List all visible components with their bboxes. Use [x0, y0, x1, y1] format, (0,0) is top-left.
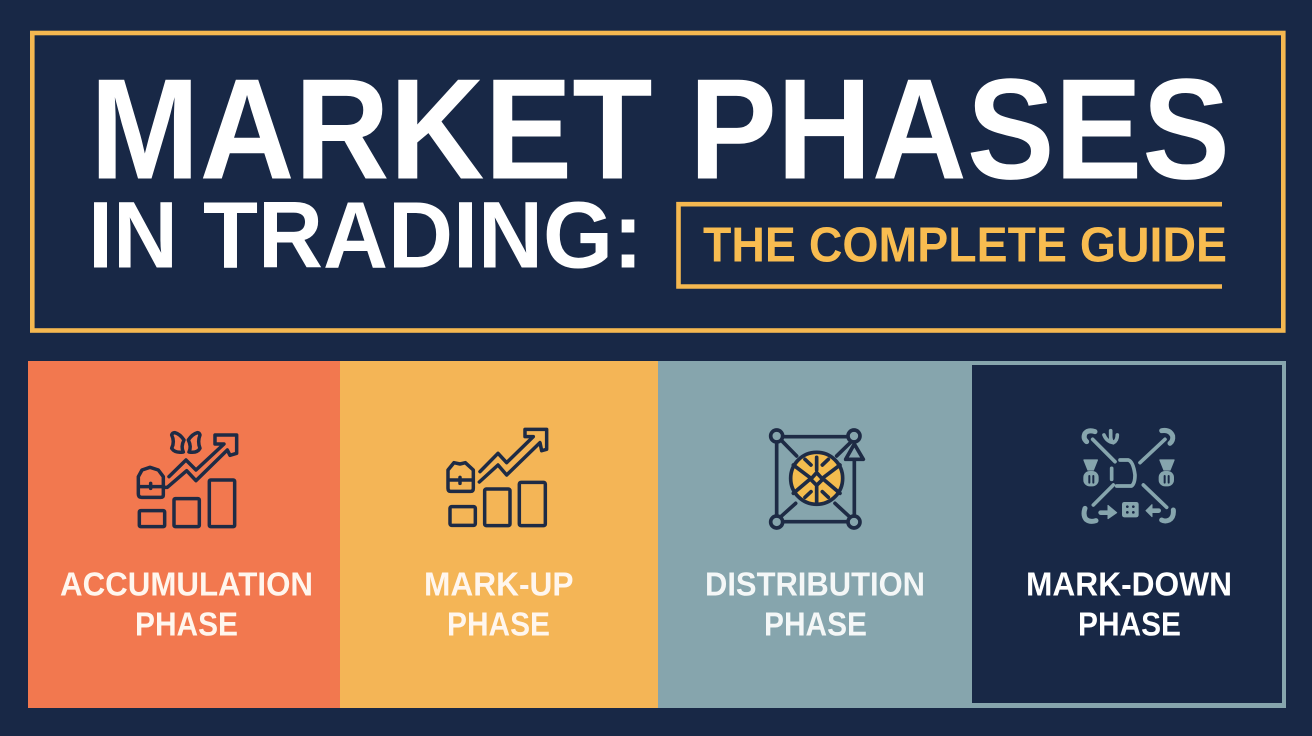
panel: distribution phase [658, 361, 1286, 708]
title block [88, 50, 1230, 288]
icon: mark-down arrows [1084, 430, 1174, 521]
icon: accumulation chart [138, 433, 237, 527]
mark-up label: PHASE [447, 606, 550, 643]
subtitle text: THE COMPLETE GUIDE [703, 218, 1227, 272]
distribution background [658, 361, 1286, 708]
accumulation background [28, 361, 340, 708]
mark-up label: MARK-UP [424, 566, 573, 602]
title panel frame [32, 33, 1283, 330]
icon: distribution network [771, 430, 863, 528]
panel: mark-down phase [972, 365, 1282, 703]
distribution label: DISTRIBUTION [705, 566, 925, 602]
subtitle box [678, 204, 1227, 286]
panel: accumulation phase [28, 361, 340, 708]
mark-down label: PHASE [1078, 606, 1181, 643]
mark-down label: MARK-DOWN [1026, 566, 1232, 602]
accumulation label: PHASE [135, 606, 238, 643]
icon: mark-up chart [448, 429, 547, 526]
distribution label: PHASE [764, 606, 867, 643]
accumulation label: ACCUMULATION [60, 566, 313, 602]
title line 2: IN TRADING: [88, 182, 643, 288]
panel: mark-up phase [340, 361, 658, 708]
subtitle open frame [678, 204, 1222, 286]
title line 1: MARKET PHASES [90, 50, 1230, 210]
mark-up background [340, 361, 658, 708]
mark-down background [972, 365, 1282, 703]
